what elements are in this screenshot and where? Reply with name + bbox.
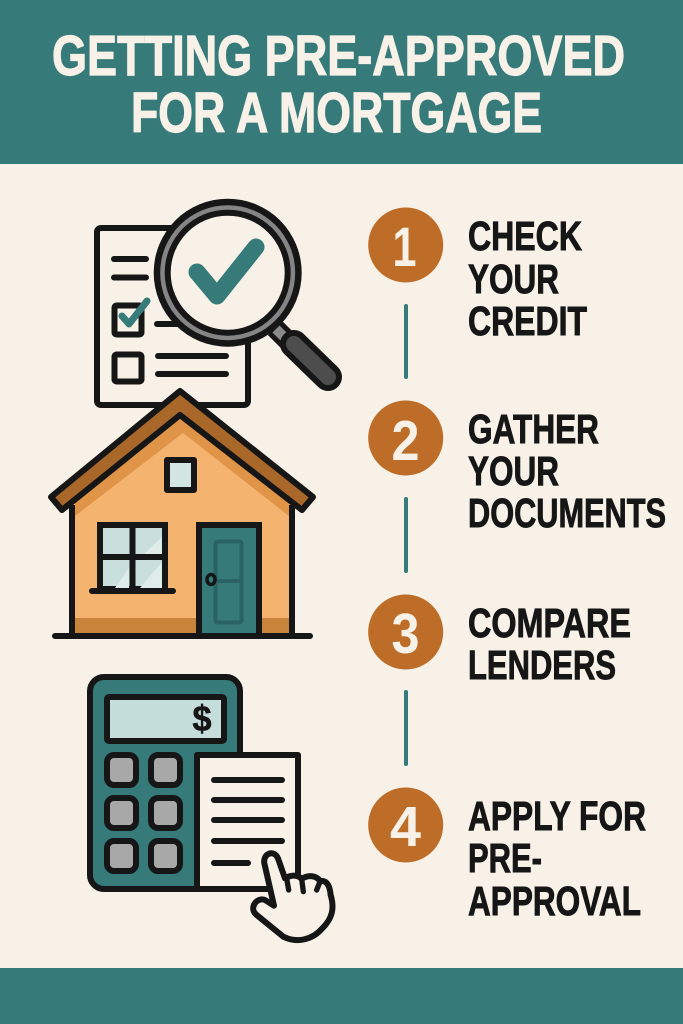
calculator body	[90, 677, 240, 889]
magnifying glass	[154, 199, 328, 377]
step 3 label: LENDERS	[468, 642, 616, 688]
connector 2 to 3	[404, 499, 408, 571]
pointing hand	[253, 853, 333, 940]
step 4 label	[468, 793, 646, 924]
number badge 4: 4	[390, 795, 421, 859]
paper	[197, 755, 298, 889]
roof	[51, 391, 313, 510]
connector 1 to 2	[404, 306, 408, 377]
front window	[92, 525, 173, 591]
step 1 label: YOUR	[468, 256, 559, 302]
icon: checklist with magnifying glass	[97, 199, 328, 405]
number badge 1: 1	[392, 215, 416, 278]
icon: calculator with paper and hand	[90, 677, 333, 940]
step 2 label: YOUR	[468, 448, 559, 494]
title: FOR A MORTGAGE	[131, 81, 542, 145]
calculator screen: $	[192, 698, 212, 739]
step 1: check your credit	[368, 208, 587, 344]
icon: house	[51, 391, 313, 636]
number badge 2: 2	[392, 409, 420, 473]
number badge 3	[368, 594, 443, 670]
calculator buttons	[107, 755, 180, 871]
attic window	[167, 460, 194, 490]
house walls	[72, 412, 292, 636]
ground line	[55, 633, 310, 639]
step 2 label: GATHER	[468, 406, 599, 452]
footer band	[0, 968, 683, 1024]
number badge 2	[368, 400, 443, 476]
step 3 label	[468, 600, 631, 688]
step 3: compare lenders	[368, 594, 631, 688]
step 1 label: CHECK	[468, 213, 582, 259]
step 2: gather your documents	[368, 400, 666, 536]
step 1 label: CREDIT	[468, 298, 587, 344]
door	[199, 525, 259, 636]
title	[52, 24, 625, 145]
calculator screen	[107, 697, 224, 741]
header banner	[0, 0, 683, 164]
checklist document	[97, 228, 248, 405]
step 1 label	[468, 213, 587, 344]
step 4: apply for pre-approval	[368, 788, 646, 924]
number badge 1	[368, 208, 443, 282]
step 3 label: COMPARE	[468, 600, 631, 646]
connector 3 to 4	[404, 692, 408, 764]
step 4 label: PRE-	[468, 835, 542, 881]
number badge 4	[368, 788, 443, 862]
step 2 label	[468, 406, 666, 536]
number badge 3: 3	[392, 602, 420, 666]
